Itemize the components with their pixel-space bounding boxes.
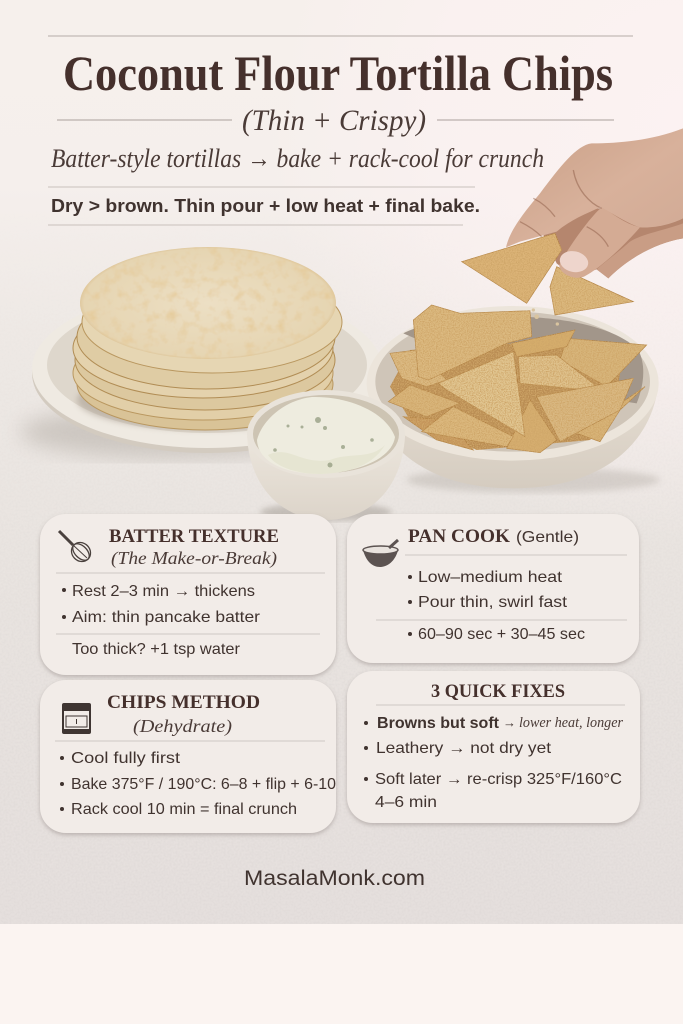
panel: pan cook: Pour thin, swirl fast: [418, 594, 568, 611]
held chip back: [550, 267, 633, 315]
panel: chips method: Bake 375°F / 190°C: 6–8 + flip + 6-10: [71, 776, 336, 793]
panel: quick fixes: [347, 671, 640, 823]
panel: pan cook: [347, 514, 639, 663]
panel: pan cook: Low–medium heat: [418, 569, 563, 586]
palm shadow and lower fingers: [543, 208, 683, 278]
panel: chips method: [40, 680, 336, 833]
panel: quick fixes: lower heat, longer: [519, 715, 623, 731]
icon: oven: [63, 704, 90, 733]
panel: pan cook: 60–90 sec + 30–45 sec: [418, 626, 585, 643]
title block: [48, 36, 633, 225]
chips pile: [388, 305, 647, 453]
dip: [257, 397, 395, 474]
panel: batter texture: [40, 514, 336, 675]
panel: chips method: Cool fully first: [71, 750, 181, 767]
subtitle: (Thin + Crispy): [242, 104, 426, 137]
panel: chips method: (Dehydrate): [133, 716, 232, 737]
tagline: Batter-style tortillas → bake + rack-cool for crunch: [51, 144, 544, 173]
panel: batter texture: (The Make-or-Break): [111, 548, 277, 569]
heading: BATTER TEXTURE: [109, 526, 279, 547]
panel: batter texture: Aim: thin pancake batter: [72, 609, 261, 626]
heading: PAN COOK: [408, 526, 510, 547]
panel: quick fixes: Soft later → re-crisp 325°F/160°C: [375, 771, 622, 788]
panel: batter texture: Too thick? +1 tsp water: [72, 641, 241, 658]
panel: quick fixes: Leathery → not dry yet: [376, 740, 552, 757]
held chip front: [462, 233, 562, 303]
footer website: MasalaMonk.com: [244, 867, 425, 890]
photo: hand holding chips: [462, 128, 683, 315]
key rule: Dry > brown. Thin pour + low heat + final bake.: [51, 195, 480, 216]
hand: [506, 128, 683, 278]
photo: dip bowl: [247, 390, 405, 521]
background paper: [0, 210, 683, 924]
photo: plate of tortillas: [20, 247, 382, 458]
icon: pan: [363, 540, 398, 567]
tortilla stack: [73, 247, 342, 430]
panel: pan cook: (Gentle): [516, 529, 579, 546]
icon: whisk: [59, 531, 94, 565]
title: Coconut Flour Tortilla Chips: [63, 45, 613, 101]
photo: bowl of chips: [367, 305, 660, 493]
heading: CHIPS METHOD: [107, 692, 260, 713]
panel: chips method: Rack cool 10 min = final crunch: [71, 801, 297, 818]
falling crumbs: [534, 314, 539, 319]
panel: quick fixes: 4–6 min: [375, 794, 437, 811]
panel: quick fixes: Browns but soft: [377, 715, 500, 732]
heading: 3 QUICK FIXES: [431, 681, 565, 702]
panel: batter texture: Rest 2–3 min → thickens: [72, 583, 255, 600]
panel: quick fixes: →: [503, 715, 516, 730]
thumbnail: [558, 249, 590, 275]
